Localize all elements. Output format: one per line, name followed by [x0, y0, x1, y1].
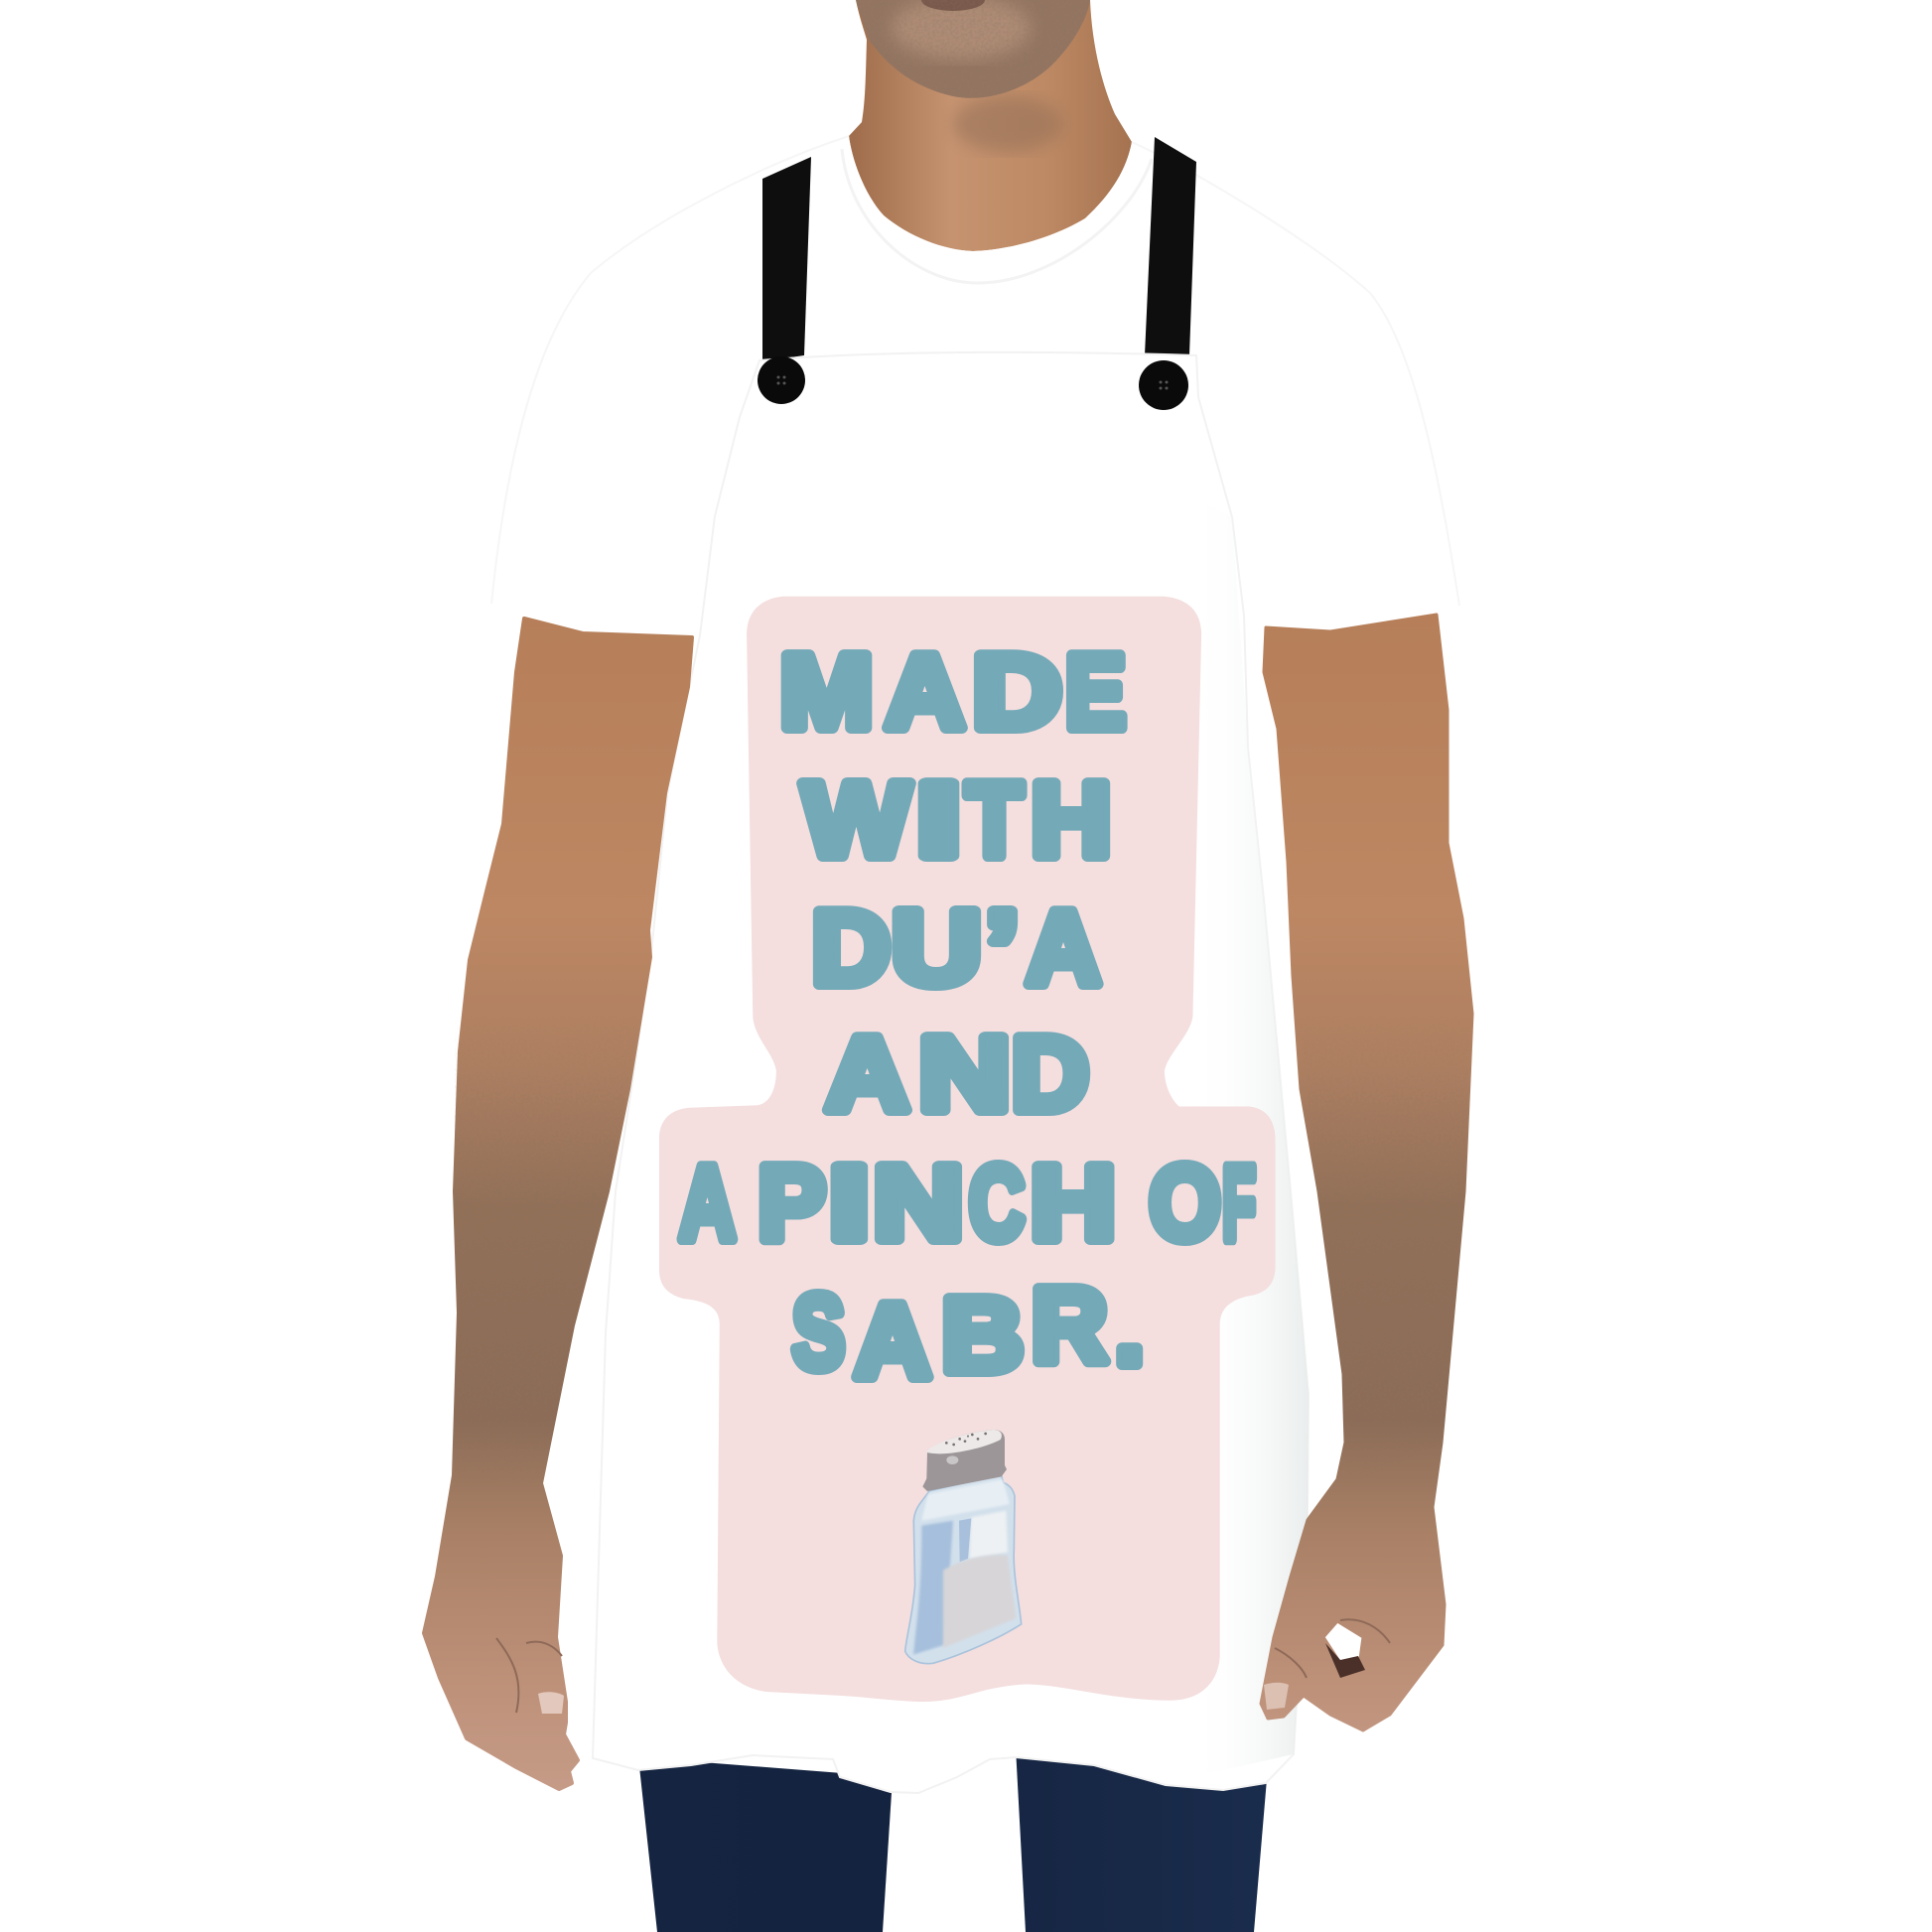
line: A PINCH OF: I: [829, 1145, 870, 1262]
line: SABR.: S: [792, 1274, 845, 1391]
line: DU'A: U: [892, 890, 982, 1007]
line: MADE: A: [886, 633, 965, 751]
line: MADE: D: [973, 633, 1061, 751]
line: DU'A: A: [1027, 890, 1100, 1007]
line: A PINCH OF: O: [1150, 1145, 1220, 1262]
line: A PINCH OF: P: [759, 1145, 826, 1262]
line: SABR.: .: [1115, 1270, 1144, 1387]
icon: salt shaker: [905, 1430, 1022, 1664]
line: WITH: I: [916, 761, 961, 879]
line: A PINCH OF: H: [1031, 1145, 1116, 1262]
line: MADE: M: [780, 633, 874, 751]
black neck straps: [762, 137, 1196, 361]
neck and chin of the model: [849, 0, 1132, 251]
white t-shirt: [491, 136, 1459, 637]
line: A PINCH OF: N: [874, 1145, 963, 1262]
line: WITH: T: [966, 761, 1023, 879]
line: DU'A: D: [812, 890, 891, 1007]
line: A PINCH OF: A: [679, 1145, 734, 1262]
left arm and hand: [424, 619, 692, 1789]
slogan text: [679, 633, 1256, 1400]
line: A PINCH OF: F: [1222, 1145, 1256, 1262]
line: WITH: H: [1031, 761, 1111, 879]
pink print panel: [659, 597, 1276, 1702]
line: MADE: E: [1065, 633, 1126, 751]
line: A PINCH OF: C: [969, 1145, 1025, 1262]
line: AND: D: [1012, 1016, 1089, 1133]
navy jeans: [638, 1747, 1268, 1932]
line: SABR.: R: [1032, 1267, 1108, 1384]
line: SABR.: A: [854, 1283, 931, 1400]
line: AND: A: [826, 1016, 909, 1133]
right arm and hand: [1261, 615, 1472, 1730]
line: SABR.: B: [941, 1277, 1024, 1394]
white apron: [593, 352, 1309, 1793]
line: DU'A: ’: [985, 890, 1019, 1007]
line: AND: N: [919, 1016, 1011, 1133]
apron buttons: [758, 356, 1188, 410]
line: WITH: W: [802, 761, 909, 879]
